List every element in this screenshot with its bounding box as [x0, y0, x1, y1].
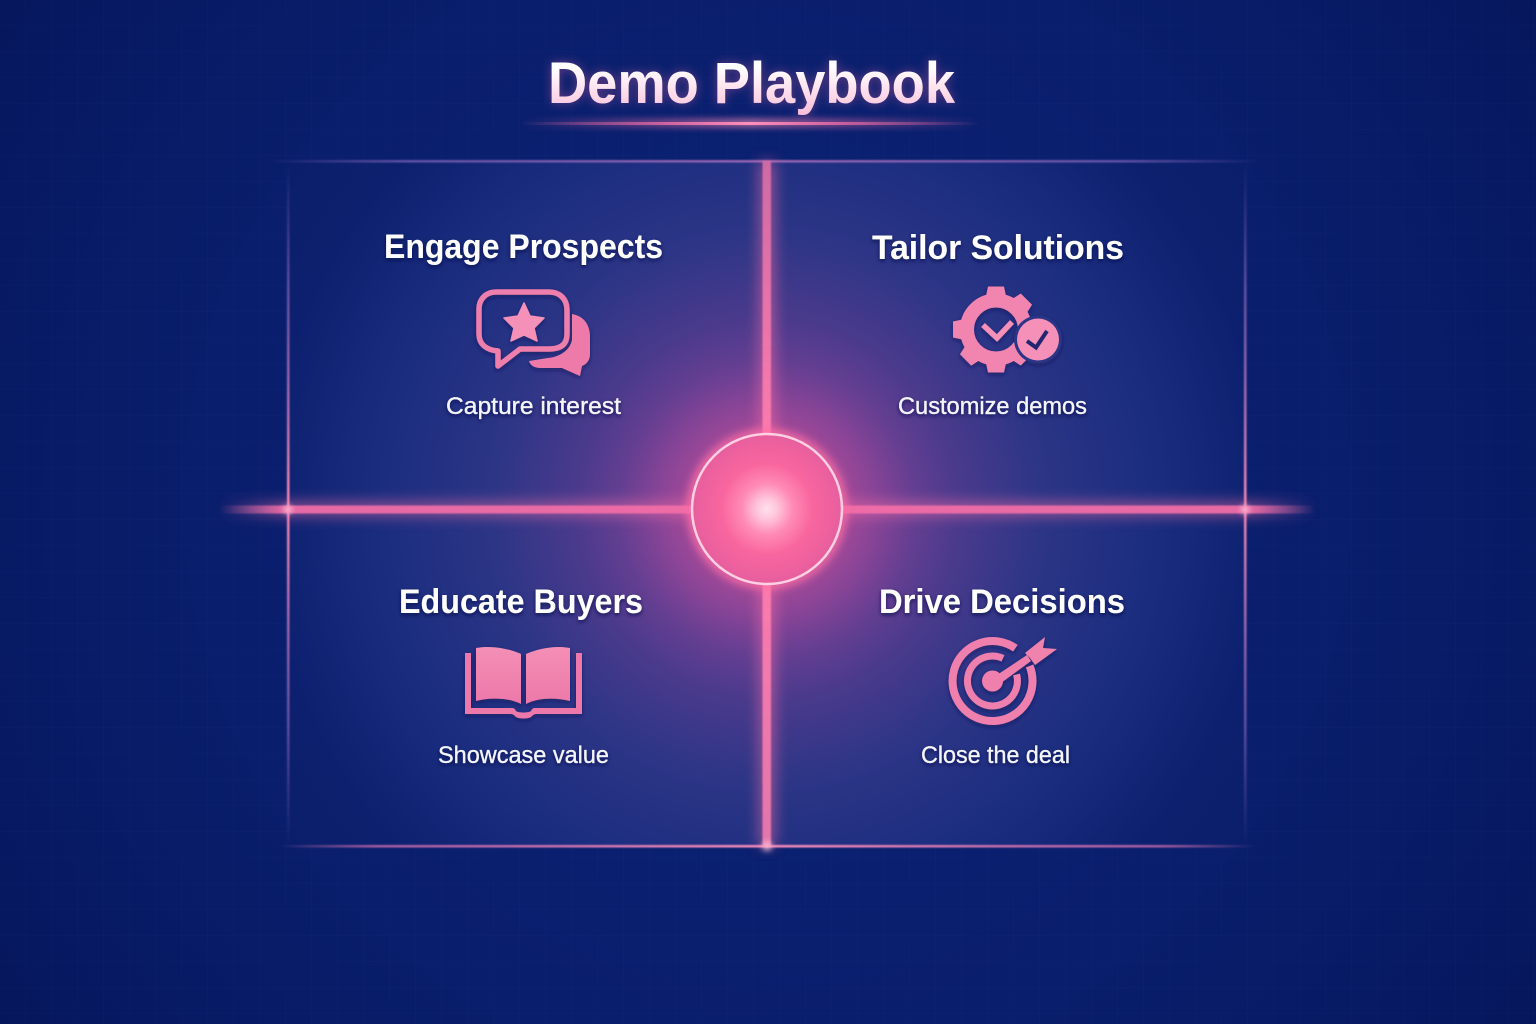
- connector: horizontal glowing axis: [220, 502, 1315, 516]
- center hub circle: [691, 433, 843, 585]
- heading: Drive Decisions: Drive Decisions: [879, 583, 1125, 621]
- icon: target with arrow: [953, 637, 1057, 721]
- heading: Tailor Solutions: Tailor Solutions: [872, 229, 1124, 267]
- panel: Tailor Solutions: [872, 229, 1124, 420]
- title: Demo Playbook: [548, 51, 956, 116]
- label: Showcase value: Showcase value: [438, 742, 609, 769]
- frame: outer border lines: [270, 160, 1260, 848]
- connector: vertical glowing axis: [759, 161, 775, 851]
- heading: Engage Prospects: Engage Prospects: [384, 228, 663, 266]
- center glow: [617, 359, 917, 659]
- label: Capture interest: Capture interest: [446, 393, 621, 420]
- panel: Educate Buyers: [399, 583, 643, 769]
- icon: open book: [465, 647, 582, 718]
- label: Customize demos: Customize demos: [898, 393, 1087, 420]
- panel: quadrant field: [288, 161, 1245, 846]
- icon: gear with check marks: [953, 286, 1062, 372]
- title underline: [520, 118, 980, 128]
- label: Close the deal: Close the deal: [921, 742, 1070, 769]
- heading: Educate Buyers: Educate Buyers: [399, 583, 643, 621]
- icon: speech bubbles with star: [479, 292, 590, 376]
- panel: Engage Prospects: [384, 228, 663, 420]
- panel: Drive Decisions: [879, 583, 1125, 769]
